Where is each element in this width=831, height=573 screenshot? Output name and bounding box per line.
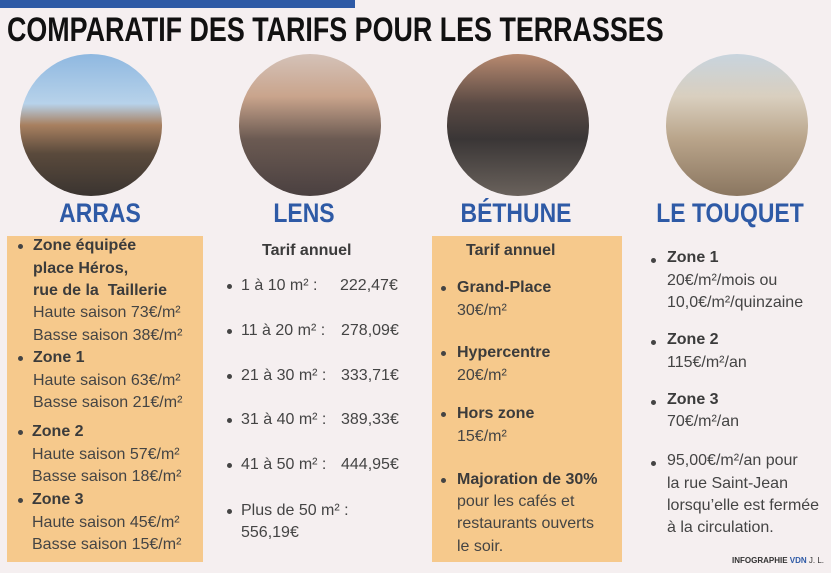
- panel: Lens: 11 à 20 m² :: [241, 322, 325, 339]
- panel: Béthune: 15€/m²: [457, 428, 507, 445]
- text: LE TOUQUET: [656, 198, 804, 228]
- panel: Béthune: [432, 236, 622, 562]
- photo: Lens: [239, 54, 381, 196]
- panel: Lens: 21 à 30 m² :: [241, 367, 326, 384]
- panel: Arras: Zone 2: [32, 423, 84, 440]
- panel: Arras: Haute saison 73€/m²: [33, 304, 181, 321]
- photo: Arras: [20, 54, 162, 196]
- panel: Lens: 31 à 40 m² :: [241, 411, 326, 428]
- panel: Arras: Zone 3: [32, 491, 84, 508]
- panel: Le Touquet: 10,0€/m²/quinzaine: [667, 294, 803, 311]
- panel: Béthune: Tarif annuel: [466, 242, 556, 259]
- photo: Béthune: [447, 54, 589, 196]
- panel: Le Touquet: 95,00€/m²/an pour: [667, 452, 798, 469]
- panel: Le Touquet: 20€/m²/mois ou: [667, 272, 777, 289]
- panel: Arras: Haute saison 57€/m²: [32, 446, 180, 463]
- panel: Lens: 222,47€: [340, 277, 398, 294]
- panel: Arras: Basse saison 21€/m²: [33, 394, 182, 411]
- panel: Arras: Basse saison 15€/m²: [32, 536, 181, 553]
- panel: Arras: Haute saison 45€/m²: [32, 514, 180, 531]
- panel: Béthune: restaurants ouverts: [457, 515, 594, 532]
- panel: Arras: Basse saison 18€/m²: [32, 468, 181, 485]
- panel: Le Touquet: à la circulation.: [667, 519, 774, 536]
- panel: Lens: 556,19€: [241, 524, 299, 541]
- title: COMPARATIF DES TARIFS POUR LES TERRASSES: [7, 11, 664, 49]
- panel: Arras: Zone 1: [33, 349, 85, 366]
- panel: Le Touquet: 115€/m²/an: [667, 354, 747, 371]
- panel: Le Touquet: Zone 3: [667, 391, 719, 408]
- panel: Lens: 1 à 10 m² :: [241, 277, 317, 294]
- panel: Le Touquet: [651, 249, 819, 536]
- panel: Arras: [7, 236, 203, 562]
- panel: Béthune: Hors zone: [457, 405, 534, 422]
- panel: Béthune: le soir.: [457, 538, 503, 555]
- panel: Arras: Haute saison 63€/m²: [33, 372, 181, 389]
- panel: Arras: Zone équipée: [33, 237, 136, 254]
- credit: INFOGRAPHIE VDN J. L.: [732, 556, 824, 565]
- panel: Arras: Basse saison 38€/m²: [33, 327, 182, 344]
- panel: Béthune: 30€/m²: [457, 302, 507, 319]
- panel: Le Touquet: 70€/m²/an: [667, 413, 739, 430]
- panel: Lens: 333,71€: [341, 367, 399, 384]
- panel: Lens: [227, 242, 399, 541]
- panel: Arras: rue de la Taillerie: [33, 282, 167, 299]
- text: BÉTHUNE: [461, 198, 571, 228]
- panel: Arras: place Héros,: [33, 260, 128, 277]
- panel: Le Touquet: lorsqu’elle est fermée: [667, 497, 819, 514]
- panel: Lens: 389,33€: [341, 411, 399, 428]
- photo: Le Touquet: [666, 54, 808, 196]
- panel: Le Touquet: Zone 1: [667, 249, 719, 266]
- panel: Le Touquet: la rue Saint-Jean: [667, 475, 788, 492]
- panel: Béthune: Majoration de 30%: [457, 471, 597, 488]
- panel: Lens: 278,09€: [341, 322, 399, 339]
- panel: Le Touquet: Zone 2: [667, 331, 719, 348]
- city names: ARRAS: [59, 198, 141, 228]
- panel: Béthune: 20€/m²: [457, 367, 507, 384]
- text: LENS: [273, 198, 335, 228]
- panel: Béthune: pour les cafés et: [457, 493, 574, 510]
- panel: Lens: 41 à 50 m² :: [241, 456, 326, 473]
- panel: Béthune: Grand-Place: [457, 279, 551, 296]
- panel: Lens: Plus de 50 m² :: [241, 502, 349, 519]
- panel: Lens: Tarif annuel: [262, 242, 352, 259]
- panel: Lens: 444,95€: [341, 456, 399, 473]
- panel: Béthune: Hypercentre: [457, 344, 550, 361]
